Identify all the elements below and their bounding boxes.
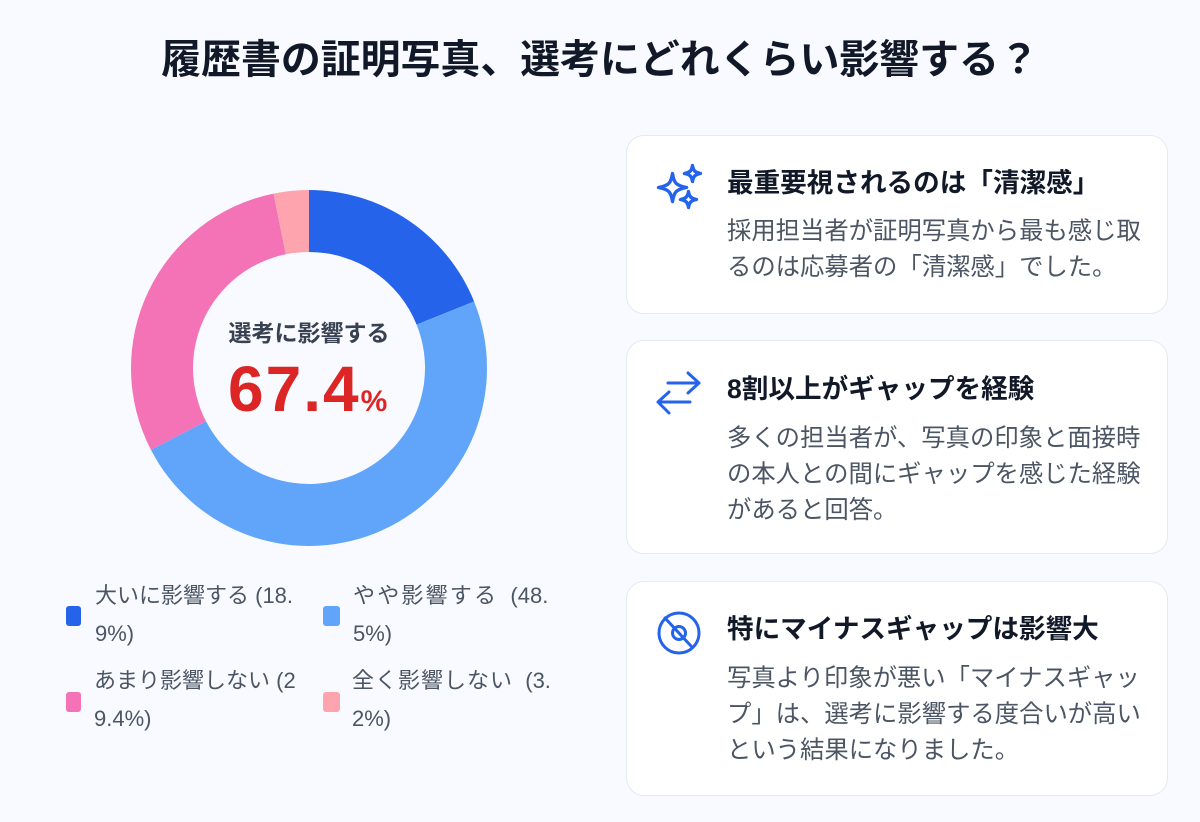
card body: があると回答。 xyxy=(727,496,897,524)
card heading: 8割以上がギャップを経験 xyxy=(727,374,1034,404)
center value: 67.4% xyxy=(228,353,387,425)
icon: exchange arrows xyxy=(656,371,701,415)
card body: るのは応募者の「清潔感」でした。 xyxy=(727,254,1116,280)
panel: 清潔感 xyxy=(626,135,1168,314)
legend label: 全く影響しない: 2%) xyxy=(352,706,391,731)
title: 履歴書の証明写真、選考にどれくらい影響する？ xyxy=(161,38,1039,82)
legend label: あまり影響しない: あまり影響しない (2 xyxy=(94,668,296,693)
card body xyxy=(727,664,1141,764)
legend label: やや影響する xyxy=(353,583,548,646)
card body: プ」は、選考に影響する度合いが高い xyxy=(727,700,1141,728)
center caption: 選考に影響する xyxy=(228,320,390,346)
swatch: 大いに影響する xyxy=(66,606,81,626)
card body: 採用担当者が証明写真から最も感じ取 xyxy=(727,218,1141,244)
card body xyxy=(727,218,1141,280)
panel: マイナスギャップ xyxy=(626,581,1168,796)
swatch: 全く影響しない xyxy=(323,692,340,712)
icon: sparkles xyxy=(656,164,702,210)
card body: という結果になりました。 xyxy=(727,736,1019,764)
segment: 大いに影響する 18.9% xyxy=(309,190,474,325)
legend label: やや影響する: やや影響する (48. xyxy=(353,583,548,608)
legend label: 大いに影響する: 9%) xyxy=(95,621,134,646)
card heading: 最重要視されるのは「清潔感」 xyxy=(727,168,1099,198)
legend label: 全く影響しない: 全く影響しない (3. xyxy=(352,668,551,693)
card body: 多くの担当者が、写真の印象と面接時 xyxy=(727,424,1140,452)
legend label: 大いに影響する: 大いに影響する (18. xyxy=(95,583,293,608)
icon: crossed circle xyxy=(658,612,700,654)
card body: の本人との間にギャップを感じた経験 xyxy=(727,460,1141,488)
swatch: あまり影響しない xyxy=(66,692,81,712)
card body xyxy=(727,424,1141,524)
legend xyxy=(66,583,551,731)
legend label: 大いに影響する xyxy=(95,583,293,646)
card heading: 特にマイナスギャップは影響大 xyxy=(727,614,1099,644)
legend label: 全く影響しない xyxy=(352,668,551,731)
panel: ギャップ xyxy=(626,340,1168,554)
legend label: やや影響する: 5%) xyxy=(353,621,392,646)
donut chart xyxy=(131,190,487,546)
swatch: やや影響する xyxy=(323,606,340,626)
segment: やや影響する 48.5% xyxy=(151,302,487,546)
donut center label xyxy=(228,320,390,425)
legend label: あまり影響しない xyxy=(94,668,296,731)
segment: 全く影響しない 3.2% xyxy=(274,190,309,254)
segment: あまり影響しない 29.4% xyxy=(131,194,286,450)
legend label: あまり影響しない: 9.4%) xyxy=(94,706,151,731)
card body: 写真より印象が悪い「マイナスギャッ xyxy=(727,664,1140,692)
